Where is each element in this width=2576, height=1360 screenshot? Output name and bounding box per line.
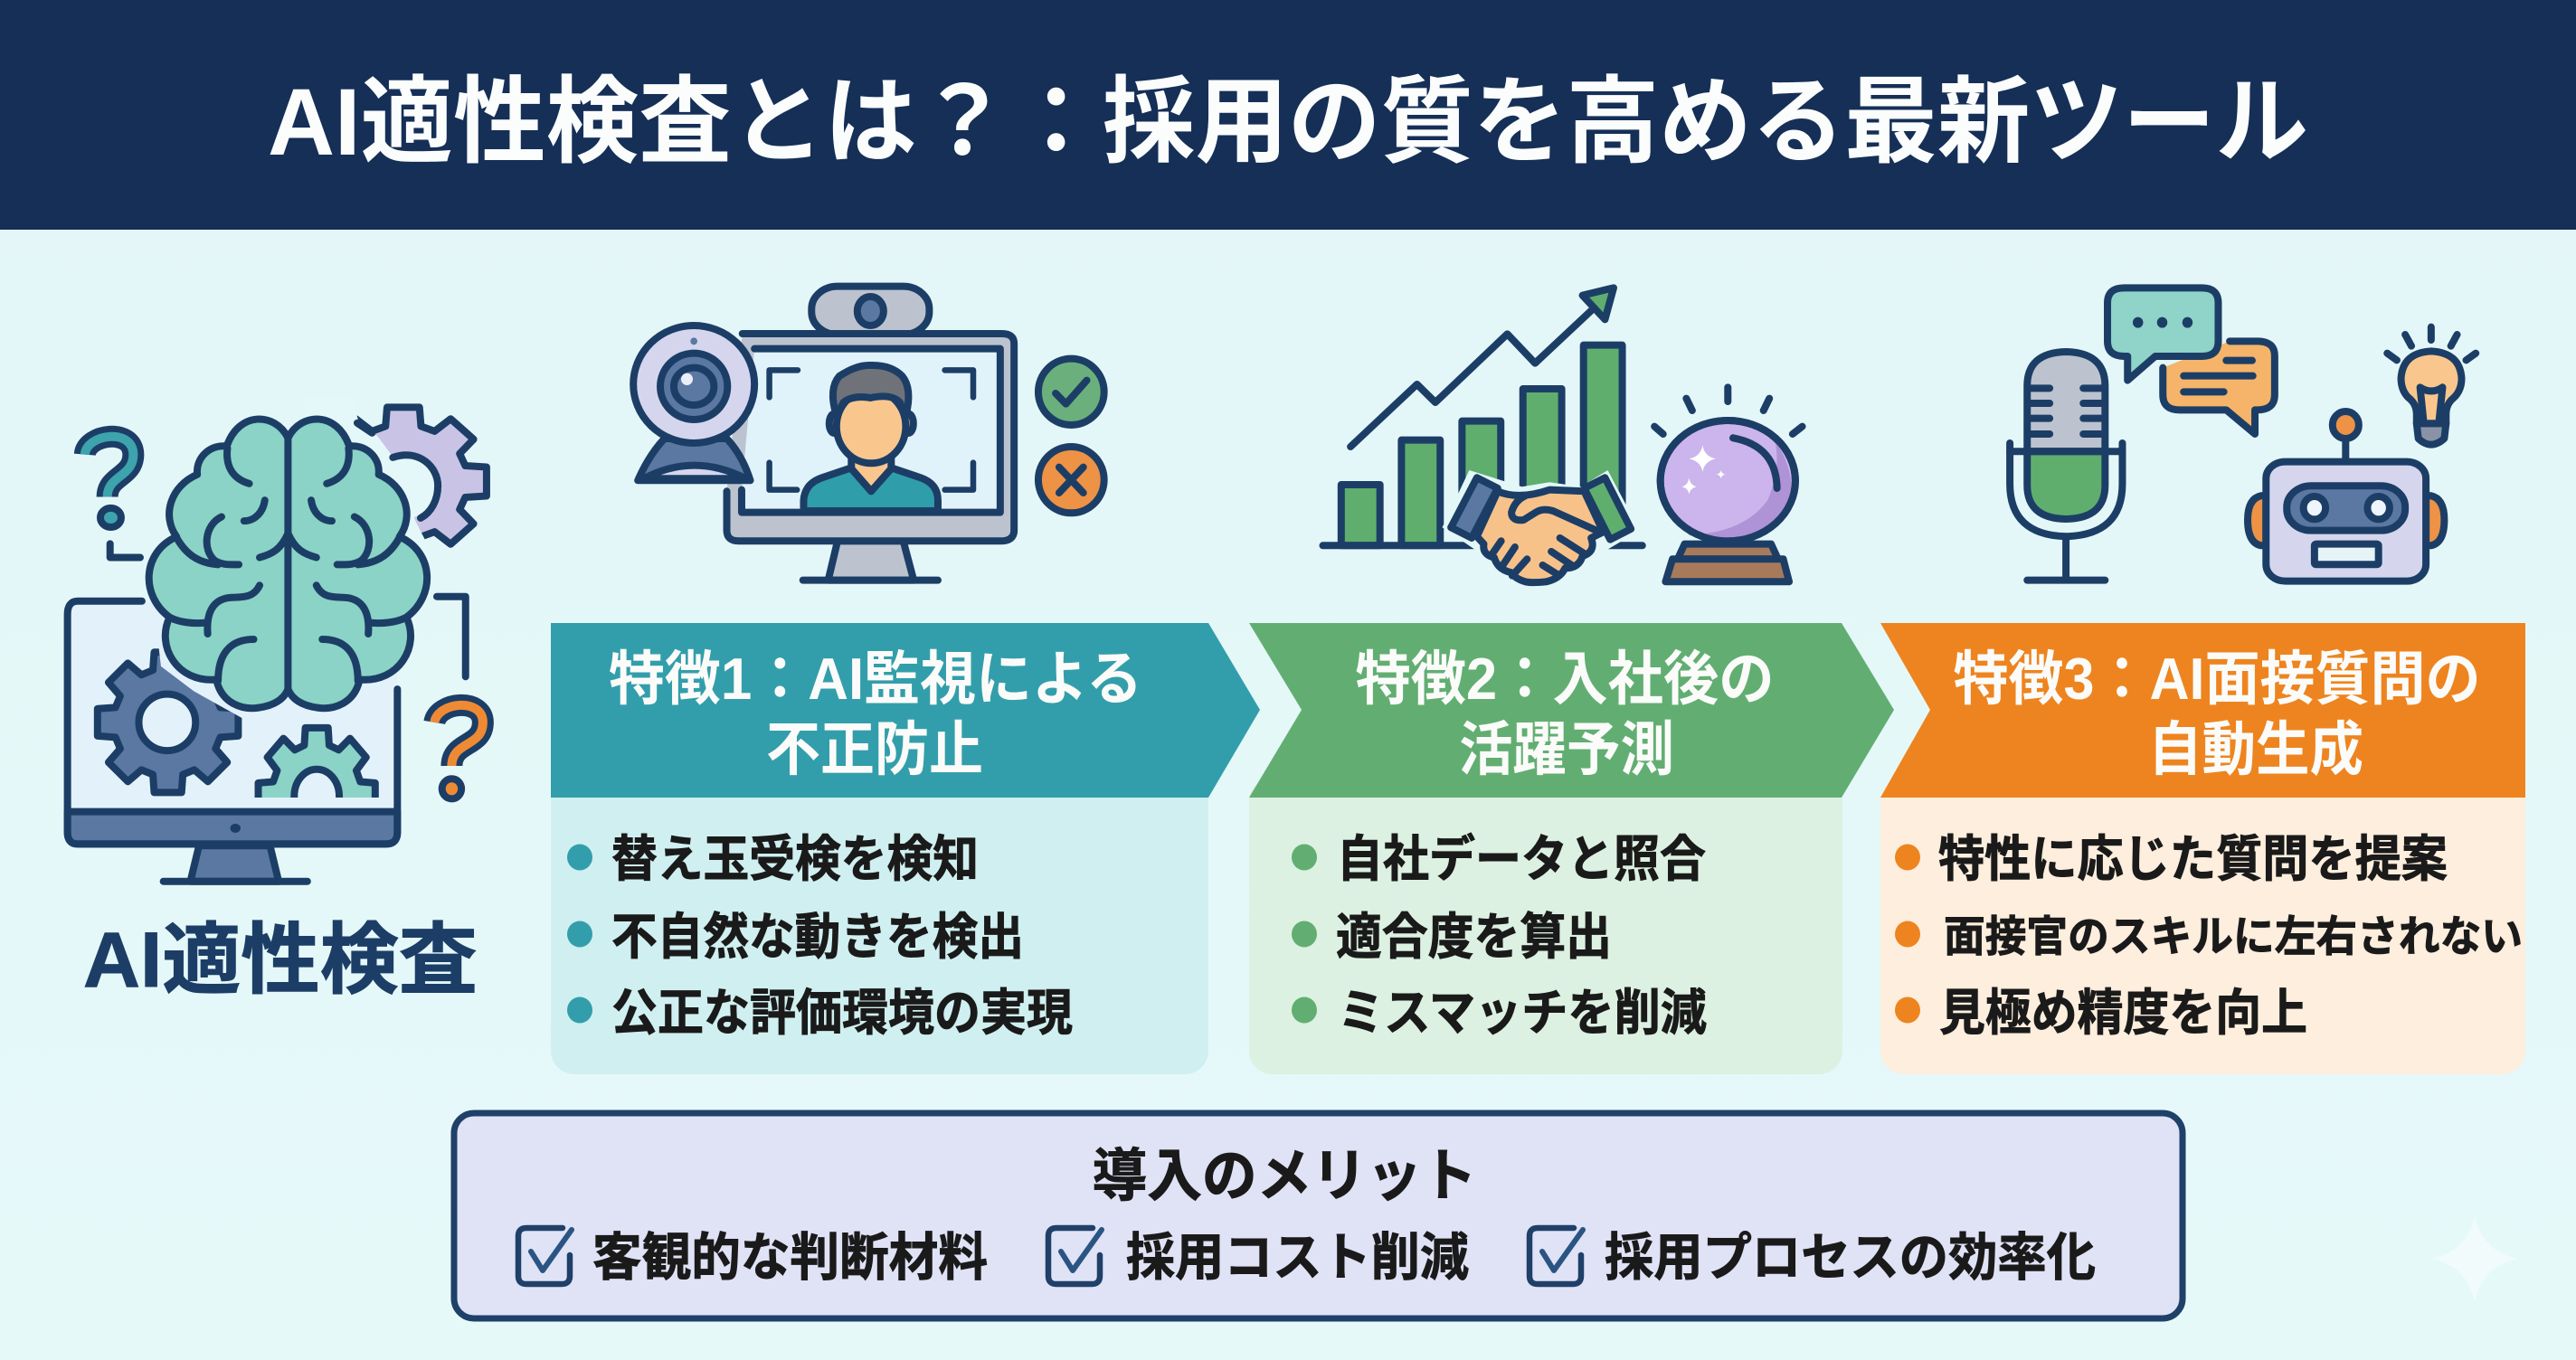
icon: crystal ball [1654,387,1803,581]
icon: cross mark [1038,447,1104,513]
icon: brain [149,419,427,708]
bullet list 1: 公正な評価環境の実現 [611,985,1073,1041]
bar chart with rising arrow [1323,288,1643,545]
icon: teal speech bubble [2107,288,2218,381]
bullet list 2: ミスマッチを削減 [1338,985,1707,1041]
panel: benefits [454,1113,2183,1318]
icon: desktop monitor [68,601,397,882]
arrow header 1 [551,623,1260,798]
icon: AI brain with monitor, gears and question marks [68,396,487,882]
icon: purple gear [305,396,487,579]
icon: blue gear [98,646,250,792]
icon: microphone [2010,352,2122,581]
bullet list 2 [1292,831,1707,1041]
icon: robot [2248,411,2444,581]
panel: feature 3 [1880,623,2525,1074]
benefit 1: 客観的な判断材料 [592,1229,988,1287]
arrow header 2: 活躍予測 [1459,716,1674,782]
arrow header 3: 特徴3：AI面接質問の [1954,646,2480,712]
label: AI適性検査: AI適性検査 [83,917,478,1004]
person [803,365,938,511]
icon: teal gear [255,723,379,798]
bullet list 3 [1895,831,2523,1041]
icon: orange question mark [434,705,483,798]
arrow header 3 [1880,623,2525,798]
icon: check mark [1038,359,1104,425]
icon: handshake [1443,470,1640,590]
bullet list 1: 不自然な動きを検出 [611,909,1024,965]
bullet list 1: 替え玉受検を検知 [611,831,979,887]
panel: feature 2 [1249,623,1894,1074]
icon: microphone, chat, robot and bulb [2010,288,2476,581]
webcam [633,326,754,480]
monitor [727,287,1014,581]
arrow header 1: 不正防止 [766,716,983,782]
panel: feature 1 [551,623,1260,1074]
bullet list 3: 特性に応じた質問を提案 [1938,831,2448,887]
bullet list 1 [567,831,1073,1041]
benefit 3: 採用プロセスの効率化 [1605,1229,2096,1287]
benefit 2: 採用コスト削減 [1126,1229,1469,1287]
bullet list 2: 自社データと照合 [1337,831,1706,887]
arrow header 2 [1249,623,1894,798]
icon: webcam monitoring [633,287,1104,581]
icon: light bulb [2387,327,2476,445]
icon: teal question mark [85,437,133,527]
icon: monitor screen [68,601,397,836]
arrow header 1: 特徴1：AI監視による [609,646,1142,712]
bullet list 2: 適合度を算出 [1336,909,1612,965]
title: AI適性検査とは？：採用の質を高める最新ツール [268,70,2308,175]
arrow header 2: 特徴2：入社後の [1355,646,1775,712]
icon: sparkle watermark [2431,1215,2518,1302]
benefits heading: 導入のメリット [1093,1145,1476,1208]
icon: growth chart, handshake and crystal ball [1323,288,1803,590]
arrow header 3: 自動生成 [2148,716,2363,782]
bullet list 3: 面接官のスキルに左右されない [1944,912,2523,960]
title banner [0,0,2576,230]
icon: orange speech bubble [2163,341,2275,434]
bullet list 3: 見極め精度を向上 [1939,985,2307,1041]
